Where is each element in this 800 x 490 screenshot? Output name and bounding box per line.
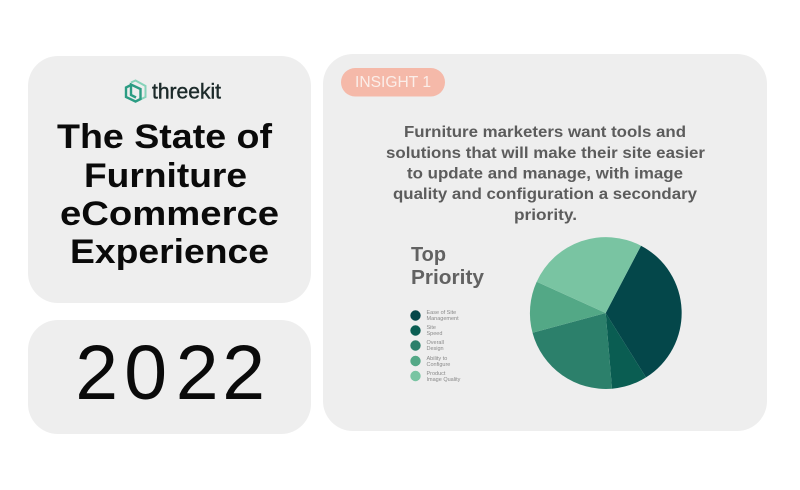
title: Furniture [84,157,247,195]
legend item: product image quality: Product [426,371,446,377]
legend item: overall design: Design [426,346,444,352]
icon: threekit hexagon mark [126,80,146,102]
insight text: solutions that will make their site easier [386,145,705,162]
pie chart [530,237,682,389]
panel: insight 1 [323,54,767,431]
legend item: site speed: Speed [426,331,442,337]
legend item: product image quality [410,371,461,383]
logo wordmark: threekit [152,80,221,104]
insight text: to update and manage, with image [407,166,683,182]
legend item: ability to configure [410,356,450,368]
legend item: site speed: Site [426,325,436,331]
legend item: product image quality: Image Quality [426,377,461,383]
insight text [386,124,705,224]
insight text: quality and configuration a secondary [393,186,697,203]
legend item: ability to configure: Configure [426,362,450,368]
logo: threekit [126,80,221,104]
chart heading: Priority [411,266,485,289]
year: 2022 [75,330,265,416]
legend item: ease of site management: Ease of Site [426,310,456,316]
panel: title card [28,56,311,303]
title: The State of [57,118,273,156]
legend item: ease of site management: Management [426,316,459,322]
title: eCommerce [60,195,279,233]
legend [410,310,461,383]
legend item: overall design: Overall [426,340,444,346]
chart heading: Top [411,243,446,266]
chart heading [411,243,485,289]
panel: year card [28,320,311,434]
badge: insight 1: INSIGHT 1 [355,74,431,91]
legend item: site speed [410,325,442,337]
legend item: ease of site management [410,310,459,322]
title [57,118,279,271]
legend item: ability to configure: Ability to [426,356,447,362]
insight text: priority. [514,207,577,224]
title: Experience [70,233,269,271]
badge: insight 1 [341,68,445,96]
legend item: overall design [410,340,444,352]
insight text: Furniture marketers want tools and [404,124,686,141]
